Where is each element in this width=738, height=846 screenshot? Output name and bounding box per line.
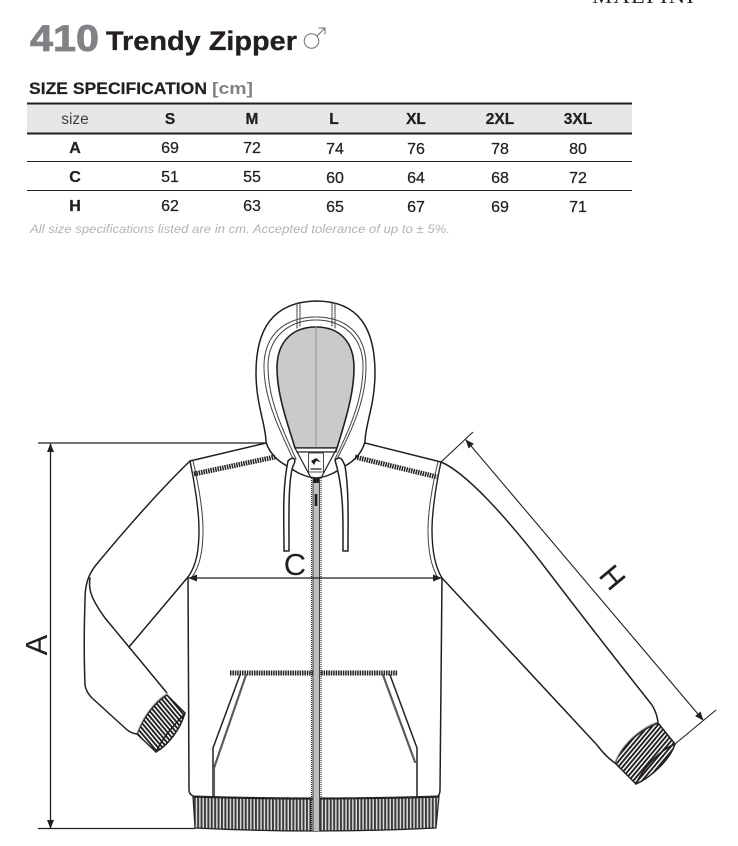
table header row: S <box>165 111 175 128</box>
zipper <box>312 478 321 831</box>
left underarm <box>129 577 188 647</box>
table header row: 2XL <box>486 111 514 128</box>
dimension A <box>19 443 266 828</box>
table header row: 3XL <box>564 111 592 128</box>
body sides <box>188 577 442 796</box>
row H: H <box>69 198 81 215</box>
row C <box>69 169 587 187</box>
right shoulder <box>365 443 441 462</box>
left drawstring <box>284 458 295 551</box>
right armhole seam <box>428 462 442 578</box>
row A: 80 <box>569 141 587 158</box>
pocket welt <box>230 670 398 676</box>
left yoke seam <box>194 457 275 474</box>
row A: 76 <box>407 141 425 158</box>
right cuff <box>615 722 675 784</box>
row A: 72 <box>243 140 261 157</box>
hoodie technical drawing <box>84 301 675 831</box>
product name: Trendy Zipper <box>106 26 297 56</box>
left pocket <box>213 675 246 797</box>
neck label <box>308 453 324 472</box>
row H: 71 <box>569 199 587 216</box>
title <box>30 18 325 59</box>
row A <box>69 140 587 158</box>
row H: 63 <box>243 198 261 215</box>
right sleeve lower edge <box>442 578 615 763</box>
left armhole seam <box>188 461 203 577</box>
row H: 67 <box>407 199 425 216</box>
row A: A <box>69 140 81 157</box>
row C: 68 <box>491 170 509 187</box>
right yoke seam <box>355 457 437 477</box>
left sleeve inner fold <box>90 578 167 693</box>
heading: size specification: [cm] <box>212 80 253 98</box>
row C: 51 <box>161 169 179 186</box>
tolerance note: All size specifications listed are in cm. Accepted tolerance of up to ± 5%. <box>29 224 450 236</box>
hem rib <box>193 797 439 831</box>
label C: C <box>284 547 306 582</box>
hood outer <box>256 301 375 478</box>
hem stitching <box>193 796 439 798</box>
table header row: L <box>329 111 339 128</box>
label H: H <box>592 559 631 597</box>
heading: size specification: SIZE SPECIFICATION <box>29 80 207 98</box>
hood panel stitching <box>264 303 366 459</box>
table header row: size <box>61 111 89 128</box>
row H <box>69 198 587 216</box>
hood opening <box>277 327 354 448</box>
right sleeve upper edge <box>441 462 658 722</box>
table header row: M <box>246 111 258 128</box>
row H: 69 <box>491 199 509 216</box>
table header row <box>61 111 592 128</box>
label A: A <box>19 634 54 655</box>
row C: 72 <box>569 170 587 187</box>
table header row: XL <box>406 111 426 128</box>
size table <box>27 102 632 216</box>
row H: 65 <box>326 199 344 216</box>
row C: 60 <box>326 170 344 187</box>
shoulders and sleeve top left <box>84 443 266 734</box>
right pocket <box>383 675 417 797</box>
hood neck band <box>295 448 337 476</box>
row A: 69 <box>161 140 179 157</box>
left cuff <box>137 693 185 752</box>
icon: male symbol <box>304 28 325 48</box>
row C: 64 <box>407 170 425 187</box>
row H: 62 <box>161 198 179 215</box>
row C: 55 <box>243 169 261 186</box>
row C: C <box>69 169 81 186</box>
product number: 410 <box>30 18 99 59</box>
dimension H <box>441 432 716 744</box>
right drawstring <box>335 458 348 551</box>
row A: 78 <box>491 141 509 158</box>
table header band <box>27 103 632 133</box>
row A: 74 <box>326 141 344 158</box>
